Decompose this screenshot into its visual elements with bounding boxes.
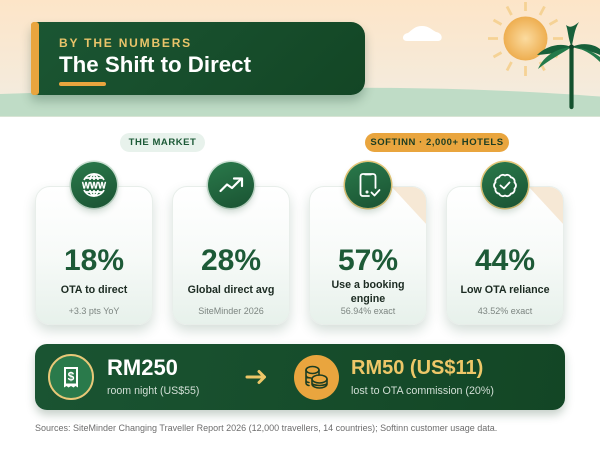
pill: softinn xyxy=(365,133,509,152)
label: engine xyxy=(351,292,385,304)
card: global direct avg xyxy=(172,186,290,325)
arrow xyxy=(246,370,266,384)
label: OTA to direct xyxy=(61,284,127,296)
icon: www globe xyxy=(71,162,117,208)
pill: the market xyxy=(120,133,205,152)
card: booking engine xyxy=(309,186,427,325)
note: 43.52% exact xyxy=(478,306,532,316)
icon: cloud xyxy=(403,26,442,41)
stat: 44% xyxy=(475,244,535,277)
card: low OTA reliance xyxy=(446,186,564,325)
header scene: sky, hill, sun, cloud, palm xyxy=(0,0,600,117)
room rate value: RM250 xyxy=(107,354,178,380)
stat: 57% xyxy=(338,244,398,277)
banner accent bar xyxy=(31,22,39,95)
label: Use a booking xyxy=(331,279,405,291)
note: SiteMinder 2026 xyxy=(198,306,264,316)
note: 56.94% exact xyxy=(341,306,395,316)
label xyxy=(331,279,405,304)
pill: the market: THE MARKET xyxy=(129,137,196,148)
label: Low OTA reliance xyxy=(460,284,550,296)
icon: www globe: WWW xyxy=(82,180,106,190)
stat: 18% xyxy=(64,244,124,277)
icon: trend up xyxy=(208,162,254,208)
title banner xyxy=(31,22,365,95)
room rate caption: room night (US$55) xyxy=(107,384,199,396)
label: Global direct avg xyxy=(188,284,274,296)
icon: phone check xyxy=(345,162,391,208)
icon: palm tree xyxy=(537,22,600,107)
sources footnote: Sources: SiteMinder Changing Traveller Report 2026 (12,000 travellers, 14 countries); Softinn customer usage data. xyxy=(35,423,497,433)
icon: receipt xyxy=(48,354,94,400)
title: The Shift to Direct xyxy=(59,52,251,77)
icon: receipt: $ xyxy=(68,370,75,384)
corner fold xyxy=(392,187,426,224)
eyebrow: BY THE NUMBERS xyxy=(59,36,192,50)
stat: 28% xyxy=(201,244,261,277)
corner fold xyxy=(530,187,563,224)
icon: coins xyxy=(294,355,339,400)
card: OTA to direct xyxy=(35,186,153,325)
pill: softinn: SOFTINN · 2,000+ HOTELS xyxy=(370,137,504,148)
commission value: RM50 (US$11) xyxy=(351,357,483,379)
title underline xyxy=(59,82,106,86)
commission bar xyxy=(35,344,565,410)
icon: sun xyxy=(504,16,548,60)
commission caption: lost to OTA commission (20%) xyxy=(351,384,494,396)
note: +3.3 pts YoY xyxy=(69,306,119,316)
icon: verified badge xyxy=(482,162,528,208)
